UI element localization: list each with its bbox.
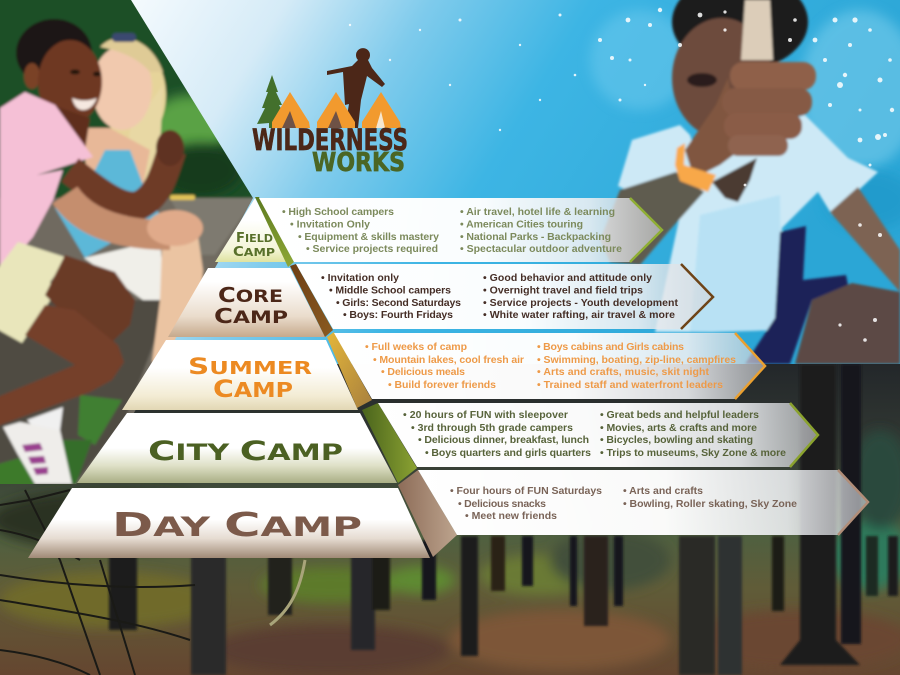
City Camp chevron <box>790 403 818 467</box>
Field Camp details: • High School campers <box>282 206 394 218</box>
Field Camp details: • National Parks - Backpacking <box>460 231 611 243</box>
City Camp details: • Great beds and helpful leaders <box>600 409 759 421</box>
boy: chest <box>712 158 757 202</box>
Core Camp bar <box>296 264 713 329</box>
Day Camp bar <box>418 470 868 535</box>
boy: shirt <box>618 115 878 332</box>
Day Camp details: • Four hours of FUN Saturdays <box>450 485 602 497</box>
boy: fist <box>685 62 816 178</box>
panel: Core Camp: C AMP <box>214 304 288 328</box>
Core Camp heading: CORE <box>218 283 283 307</box>
Summer Camp bar <box>334 333 765 399</box>
boy: right arm <box>830 187 900 292</box>
boy giving a thumbs up <box>600 0 900 364</box>
Day Camp side stripe <box>398 470 457 557</box>
Core Camp details: • Middle School campers <box>329 284 451 296</box>
Field Camp details: • Spectacular outdoor adventure <box>460 243 622 255</box>
Day Camp details <box>450 485 797 522</box>
Field Camp side stripe <box>255 197 294 267</box>
Summer Camp details: • Arts and crafts, music, skit night <box>537 366 710 378</box>
Summer Camp details: • Mountain lakes, cool fresh air <box>373 354 524 366</box>
logo: Wilderness Works: WORKS <box>312 148 405 178</box>
Day Camp details: • Bowling, Roller skating, Sky Zone <box>623 498 797 510</box>
logo: three tents <box>272 92 401 128</box>
City Camp details: • Boys quarters and girls quarters <box>425 447 591 459</box>
Core Camp details: • Boys: Fourth Fridays <box>343 309 453 321</box>
boy: shorts and thigh <box>745 226 848 364</box>
City Camp details: • 3rd through 5th grade campers <box>411 422 573 434</box>
Field Camp chevron <box>630 198 662 262</box>
panel: Day Camp <box>28 470 868 558</box>
Field Camp tier <box>215 198 288 262</box>
logo: wordmark: WILDERNESS <box>252 123 408 157</box>
City Camp heading: C ITY C AMP <box>148 436 343 467</box>
logo: runner silhouette <box>327 48 385 128</box>
logo: Wilderness Works <box>252 48 408 178</box>
Core Camp chevron <box>681 264 713 329</box>
Day Camp details: • Meet new friends <box>465 510 557 522</box>
Core Camp details: • Service projects - Youth development <box>483 297 678 309</box>
City Camp side stripe <box>362 403 417 483</box>
City Camp tier <box>77 413 397 483</box>
City Camp details: • Movies, arts & crafts and more <box>600 422 757 434</box>
panel: Summer Camp <box>122 332 765 410</box>
Core Camp tier <box>168 268 325 337</box>
photo backdrop: trees, lawn, deck <box>0 0 265 493</box>
boy: face <box>672 18 772 138</box>
Field Camp details: • Service projects required <box>306 243 438 255</box>
Core Camp details: • Girls: Second Saturdays <box>336 297 461 309</box>
Core Camp details: • Invitation only <box>321 272 399 284</box>
City Camp bar <box>378 403 818 467</box>
Field Camp details: • Equipment & skills mastery <box>298 231 439 243</box>
arms hugging <box>65 130 203 246</box>
blonde girl <box>55 33 166 258</box>
City Camp details <box>403 409 786 459</box>
Summer Camp tier <box>122 340 358 410</box>
Field Camp details: • Air travel, hotel life & learning <box>460 206 615 218</box>
forest tree trunks <box>109 364 898 675</box>
Summer Camp chevron <box>735 333 765 399</box>
Summer Camp details <box>365 341 736 391</box>
boy: hair <box>672 0 808 70</box>
first girl <box>0 19 102 268</box>
Summer Camp side stripe <box>327 332 372 408</box>
bubbles <box>349 8 894 166</box>
Field Camp heading: FIELD <box>236 231 273 246</box>
forest branches <box>0 490 305 675</box>
boy: bubbles <box>678 10 882 342</box>
background: children photo <box>0 0 265 493</box>
Core Camp details: • Good behavior and attitude only <box>483 272 652 284</box>
background: underwater photo <box>132 0 900 364</box>
Field Camp details <box>282 206 622 255</box>
Summer Camp details: • Build forever friends <box>388 379 496 391</box>
Day Camp tier <box>28 488 430 558</box>
Summer Camp details: • Full weeks of camp <box>365 341 467 353</box>
panel: City Camp <box>77 403 818 483</box>
Core Camp side stripe <box>290 264 333 337</box>
panel: Summer Camp: CAMP <box>213 375 293 403</box>
Day Camp heading: D AY C AMP <box>112 505 362 544</box>
Field Camp details: • Invitation Only <box>290 218 370 230</box>
City Camp details: • 20 hours of FUN with sleepover <box>403 409 568 421</box>
boy: forearm <box>600 172 704 265</box>
Summer Camp details: • Boys cabins and Girls cabins <box>537 341 684 353</box>
forest ground patches <box>0 430 900 675</box>
panel: Core Camp <box>168 264 713 337</box>
City Camp details: • Trips to museums, Sky Zone & more <box>600 447 786 459</box>
Summer Camp details: • Delicious meals <box>381 366 465 378</box>
City Camp details: • Delicious dinner, breakfast, lunch <box>418 434 589 446</box>
Summer Camp details: • Trained staff and waterfront leaders <box>537 379 723 391</box>
blonde girl shorts and leg <box>83 238 205 363</box>
Summer Camp details: • Swimming, boating, zip-line, campfires <box>537 354 736 366</box>
logo: pine tree <box>257 75 288 128</box>
background: forest photo <box>0 364 900 675</box>
Field Camp bar <box>259 198 662 262</box>
Core Camp details: • Overnight travel and field trips <box>483 284 643 296</box>
Summer Camp heading: S UMMER <box>188 355 312 380</box>
Day Camp details: • Arts and crafts <box>623 485 703 497</box>
boy: thumb <box>741 0 773 60</box>
Day Camp chevron <box>838 470 868 535</box>
City Camp details: • Bicycles, bowling and skating <box>600 434 753 446</box>
first girl shorts and legs <box>0 242 135 484</box>
boy: orange wristband <box>675 143 716 192</box>
panel: Field Camp <box>215 197 662 267</box>
Core Camp details: • White water rafting, air travel & more <box>483 309 675 321</box>
Core Camp details <box>321 272 678 321</box>
Field Camp details: • American Cities touring <box>460 218 583 230</box>
panel: Field Camp: CAMP <box>233 245 275 260</box>
Day Camp details: • Delicious snacks <box>458 498 546 510</box>
